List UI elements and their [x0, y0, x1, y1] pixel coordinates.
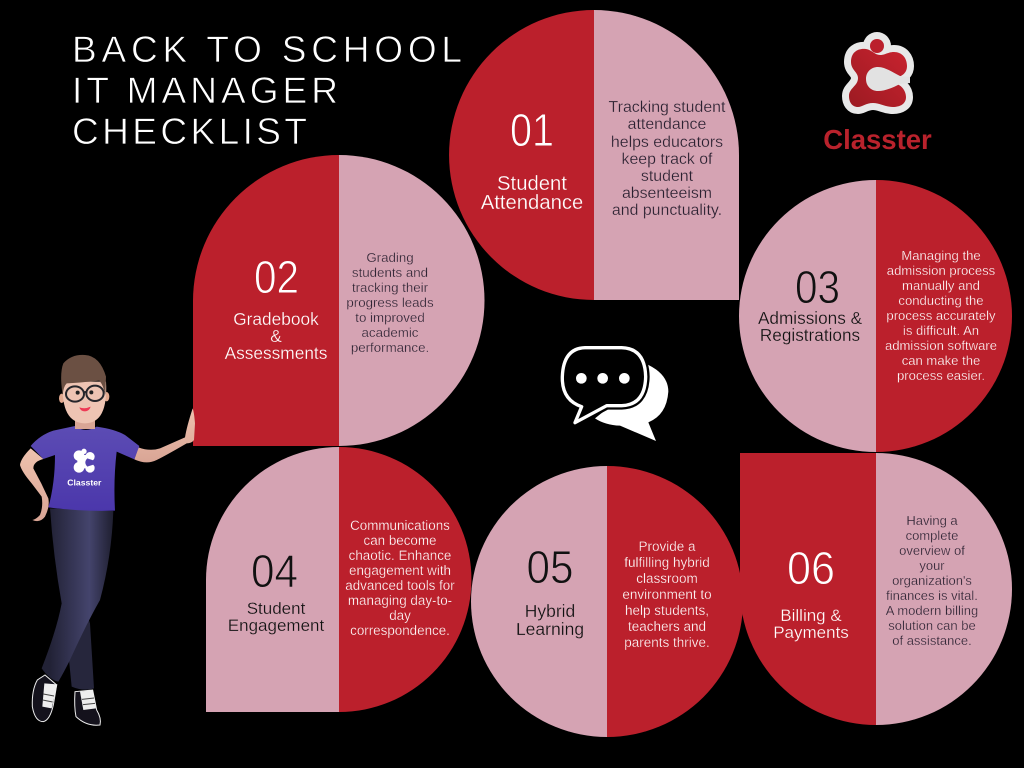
number 06: 06 — [787, 542, 835, 594]
character shirt logo: Classter — [67, 478, 102, 488]
panel: 04 student engagement — [206, 447, 471, 712]
heading: billing — [773, 606, 849, 642]
panel: 05 hybrid learning — [471, 466, 743, 737]
number 03: 03 — [795, 261, 840, 313]
number 04: 04 — [251, 545, 298, 597]
heading: gradebook — [225, 309, 328, 363]
logo mark — [849, 32, 910, 107]
text: admissions description: Managing the — [901, 248, 981, 263]
text: hybrid description: fulfilling hybrid — [624, 555, 710, 570]
heading: student attendance — [481, 173, 583, 214]
text: hybrid description: classroom — [636, 571, 698, 586]
text: attendance description: student — [641, 168, 694, 185]
panel: 01 student attendance — [449, 10, 739, 300]
character back leg — [57, 540, 94, 690]
character: man leaning — [20, 355, 195, 725]
heading: admissions: Admissions & — [758, 308, 863, 328]
text: billing description: your — [919, 558, 945, 573]
heading: gradebook: Gradebook — [233, 309, 319, 329]
character glasses — [66, 386, 104, 402]
heading: student engagement: Student — [247, 599, 306, 618]
text: gradebook description: Grading — [366, 250, 414, 265]
character right arm — [134, 408, 195, 462]
text: admissions description: conducting the — [898, 293, 984, 308]
heading: billing: Billing & — [780, 606, 842, 625]
text: admissions description — [885, 248, 997, 383]
text: admissions description: process accurately — [886, 308, 996, 323]
text: engagement description: chaotic. Enhance — [349, 548, 451, 563]
text: gradebook description: academic — [362, 325, 419, 340]
character head — [59, 355, 109, 429]
heading: student attendance: Attendance — [481, 192, 583, 214]
heading: hybrid learning: Hybrid — [525, 601, 575, 621]
title — [72, 29, 462, 152]
text: admissions description: is difficult. An — [903, 323, 979, 338]
text: gradebook description: to improved — [355, 310, 425, 325]
text: gradebook description: progress leads — [346, 295, 434, 310]
text: hybrid description: teachers and — [628, 619, 706, 634]
text: billing description: organization's — [892, 573, 972, 588]
title: CHECKLIST — [72, 111, 307, 152]
text: gradebook description: performance. — [351, 340, 429, 355]
text: billing description: finances is vital. — [886, 588, 978, 603]
number 02: 02 — [254, 251, 299, 303]
heading: student engagement: Engagement — [228, 616, 324, 635]
heading: admissions: Registrations — [760, 325, 860, 345]
heading: hybrid learning: Learning — [516, 619, 584, 639]
text: billing description: of assistance. — [892, 633, 972, 648]
text: engagement description: can become — [364, 533, 436, 548]
text: gradebook description: tracking their — [352, 280, 429, 295]
text: attendance description: attendance — [628, 116, 706, 133]
text: billing description: overview of — [899, 543, 965, 558]
heading: billing: Payments — [773, 623, 849, 642]
character shoes — [32, 675, 100, 725]
panel: 06 billing — [740, 453, 1012, 725]
text: engagement description: day — [389, 608, 411, 623]
text: engagement description: correspondence. — [350, 623, 450, 638]
text: admissions description: admission process — [887, 263, 996, 278]
heading: admissions — [758, 308, 863, 345]
character shirt logo — [67, 449, 102, 488]
logo: Classter — [823, 32, 932, 155]
heading: gradebook: & — [270, 326, 282, 346]
number 01: 01 — [510, 104, 554, 156]
text: hybrid description: environment to — [622, 587, 712, 602]
title: IT MANAGER — [72, 70, 338, 111]
text: engagement description: advanced tools for — [345, 578, 455, 593]
text: admissions description: manually and — [902, 278, 980, 293]
text: gradebook description: students and — [352, 265, 428, 280]
text: admissions description: can make the — [902, 353, 980, 368]
text: billing description: Having a — [906, 513, 958, 528]
text: attendance description: Tracking student — [609, 99, 726, 116]
heading: student engagement — [228, 599, 324, 635]
text: billing description: solution can be — [888, 618, 976, 633]
text: engagement description: engagement with — [349, 563, 451, 578]
heading: hybrid learning — [516, 601, 584, 639]
text: attendance description: absenteeism — [622, 185, 712, 202]
text: billing description: complete — [906, 528, 958, 543]
text: billing description — [886, 513, 978, 648]
text: hybrid description — [622, 539, 712, 650]
number 05: 05 — [526, 541, 574, 593]
text: engagement description: managing day-to- — [348, 593, 452, 608]
text: admissions description: admission software — [885, 338, 997, 353]
title: BACK TO SCHOOL — [72, 29, 462, 70]
text: engagement description: Communications — [350, 518, 450, 533]
text: attendance description: keep track of — [622, 151, 713, 168]
text: attendance description: and punctuality. — [612, 202, 722, 219]
character left arm — [20, 448, 49, 521]
text: hybrid description: parents thrive. — [624, 635, 710, 650]
text: attendance description — [609, 99, 726, 219]
text: engagement description — [345, 518, 455, 638]
heading: gradebook: Assessments — [225, 343, 328, 363]
character front leg — [42, 508, 113, 682]
heading: student attendance: Student — [497, 173, 567, 195]
text: gradebook description — [346, 250, 434, 355]
text: admissions description: process easier. — [897, 368, 985, 383]
text: hybrid description: Provide a — [638, 539, 696, 554]
panel: 03 admissions — [739, 180, 1012, 452]
text: hybrid description: help students, — [625, 603, 709, 618]
character shirt — [31, 426, 139, 511]
text: attendance description: helps educators — [611, 134, 723, 151]
panel: 02 gradebook — [193, 155, 484, 446]
icon: chat bubbles — [562, 348, 668, 441]
logo wordmark: Classter — [823, 124, 932, 155]
text: billing description: A modern billing — [886, 603, 978, 618]
